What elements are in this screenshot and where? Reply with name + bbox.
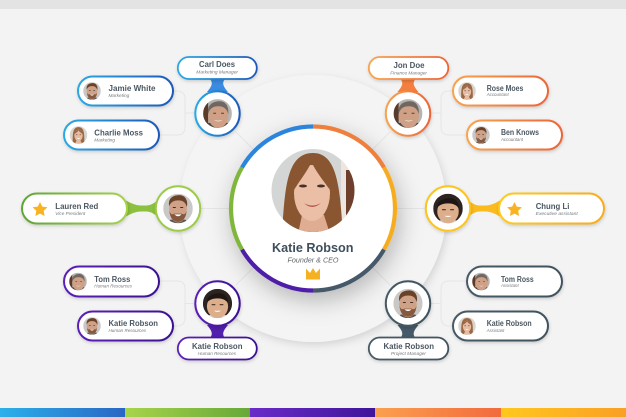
panel: Katie Robson (project manager)	[369, 281, 448, 360]
neck	[465, 197, 506, 220]
panel: Lauren Red (vice president)	[22, 186, 200, 231]
label pill	[178, 338, 257, 360]
multicolour ring	[231, 126, 395, 290]
neck	[398, 78, 418, 92]
card: Tom Ross (assistant): Tom Ross	[501, 275, 534, 284]
photo	[203, 289, 232, 318]
card: Ben Knows: Accountant	[500, 137, 524, 142]
central white circle	[229, 124, 397, 292]
card: Katie Robson (human resources): Human Resources	[108, 328, 147, 333]
name: Chung Li	[536, 202, 569, 211]
name: Katie Robson	[192, 342, 243, 351]
icon: star	[507, 202, 522, 216]
circle	[386, 281, 430, 326]
card: Rose Moes: Rose Moes	[487, 84, 524, 93]
bottom colour band	[0, 408, 626, 417]
card: Katie Robson (assistant)	[453, 312, 548, 340]
card: Tom Ross (assistant)	[467, 266, 562, 296]
panel: central profile	[229, 124, 397, 292]
card: Ben Knows	[467, 120, 562, 150]
circle	[195, 91, 240, 136]
card: Katie Robson (assistant): Katie Robson	[487, 319, 532, 328]
panel: Carl Does (marketing)	[178, 57, 257, 136]
card: Tom Ross (assistant): Assistant	[500, 283, 519, 288]
card: Katie Robson (human resources): Katie Robson	[108, 319, 158, 328]
label pill	[178, 57, 257, 79]
photo	[163, 194, 193, 223]
card: Ben Knows: Ben Knows	[501, 128, 539, 137]
card: Jamie White: Jamie White	[108, 84, 156, 93]
card: Charlie Moss: Marketing	[94, 137, 115, 142]
circle	[195, 281, 240, 326]
connectors	[160, 91, 466, 326]
backdrop disc	[180, 75, 446, 342]
role: Vice President	[55, 211, 86, 216]
photo	[433, 194, 463, 223]
neck	[120, 197, 161, 220]
role: Marketing Manager	[196, 70, 238, 74]
circle	[156, 186, 200, 231]
card: Tom Ross (human resources): Human Resources	[94, 284, 133, 288]
circle	[386, 91, 430, 136]
name: Carl Does	[199, 60, 236, 69]
CEO name: Katie Robson	[272, 240, 354, 255]
name: Lauren Red	[55, 202, 98, 211]
top band	[0, 0, 626, 9]
card: Tom Ross (human resources): Tom Ross	[94, 275, 131, 284]
label pill	[22, 194, 127, 224]
photo	[393, 289, 423, 318]
card: Katie Robson (assistant): Assistant	[486, 328, 505, 333]
photo	[394, 99, 422, 128]
neck	[207, 78, 228, 92]
CEO role: Founder & CEO	[288, 256, 339, 264]
neck	[398, 325, 418, 339]
role: Human Resources	[198, 351, 237, 356]
panel: Katie Robson (human resources lead)	[178, 281, 257, 360]
photo	[203, 99, 232, 128]
icon: star	[33, 202, 47, 216]
label pill	[369, 338, 448, 360]
card: Tom Ross (human resources)	[64, 266, 159, 296]
card: Rose Moes: Accountant	[486, 92, 509, 97]
neck	[207, 325, 228, 339]
card: Charlie Moss	[64, 120, 159, 150]
card: Katie Robson (human resources)	[78, 312, 173, 340]
role: Finance Manager	[390, 70, 427, 75]
label pill	[369, 57, 448, 79]
name: Jon Doe	[394, 61, 425, 70]
role: Project Manager	[391, 351, 426, 356]
CEO photo	[270, 148, 356, 234]
label pill	[499, 194, 604, 224]
role: Executive assistant	[536, 211, 578, 216]
panel: Chung Li (executive assistant)	[426, 186, 604, 231]
card: Charlie Moss: Charlie Moss	[94, 128, 144, 137]
icon: crown	[306, 268, 320, 280]
card: Jamie White	[78, 76, 173, 106]
card: Jamie White: Marketing	[108, 93, 130, 98]
circle	[426, 186, 470, 231]
panel: Jon Doe (finance)	[369, 57, 448, 136]
card: Rose Moes	[453, 76, 548, 106]
name: Katie Robson	[384, 342, 434, 351]
